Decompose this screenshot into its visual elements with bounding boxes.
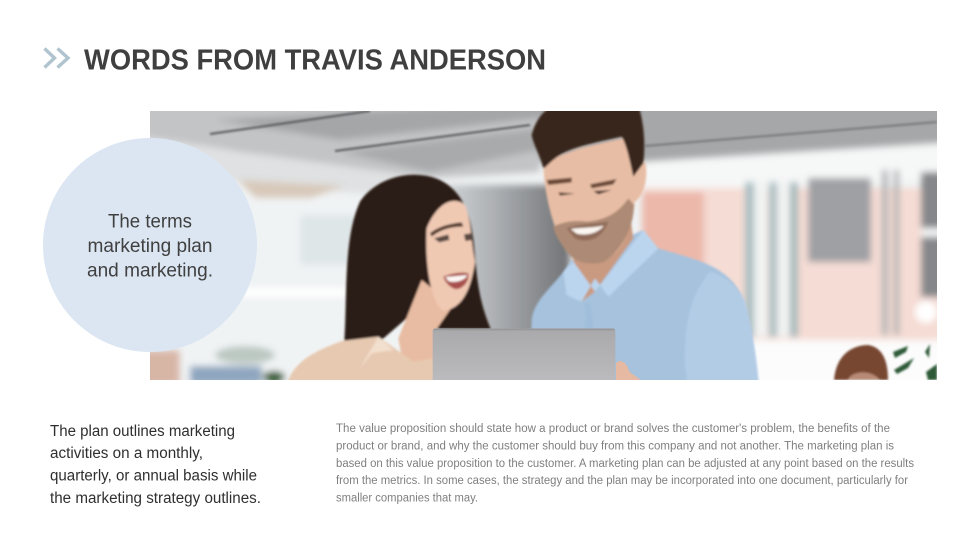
panel: circle callout — [43, 138, 257, 352]
callout text: and marketing. — [87, 260, 213, 282]
callout text: marketing plan — [88, 236, 212, 257]
tablet — [433, 328, 645, 383]
woman — [287, 175, 491, 385]
icon: double chevron — [44, 48, 68, 68]
text block: value proposition detail: The value proposition should state how a product or brand solves the customer's problem, the benefits of the — [336, 423, 890, 435]
callout text — [87, 212, 213, 282]
man — [530, 108, 759, 385]
text block: marketing plan summary: activities on a monthly, — [50, 445, 203, 462]
background person head — [834, 345, 888, 380]
text block: value proposition detail: from the metrics. In some cases, the strategy and the plan may be incorporated into one document, particularly for — [336, 475, 908, 487]
text block: value proposition detail: product or brand, and why the customer should buy from this company and not another. The marketing plan is — [336, 440, 894, 452]
text block: marketing plan summary: the marketing strategy outlines. — [50, 490, 261, 507]
text block: value proposition detail: based on this value proposition to the customer. A marketing plan can be adjusted at any point based on the results — [336, 458, 914, 470]
text block: marketing plan summary: The plan outlines marketing — [50, 423, 235, 440]
text block: value proposition detail — [336, 423, 914, 504]
callout text: The terms — [108, 212, 192, 232]
title: WORDS FROM TRAVIS ANDERSON — [84, 44, 546, 76]
photo: two colleagues looking at a tablet — [150, 111, 937, 380]
background plant — [893, 344, 937, 380]
text block: value proposition detail: smaller companies that may. — [336, 492, 478, 504]
text block: marketing plan summary: quarterly, or annual basis while — [50, 468, 257, 484]
text block: marketing plan summary — [50, 423, 261, 507]
ceiling beam lines — [210, 111, 937, 151]
